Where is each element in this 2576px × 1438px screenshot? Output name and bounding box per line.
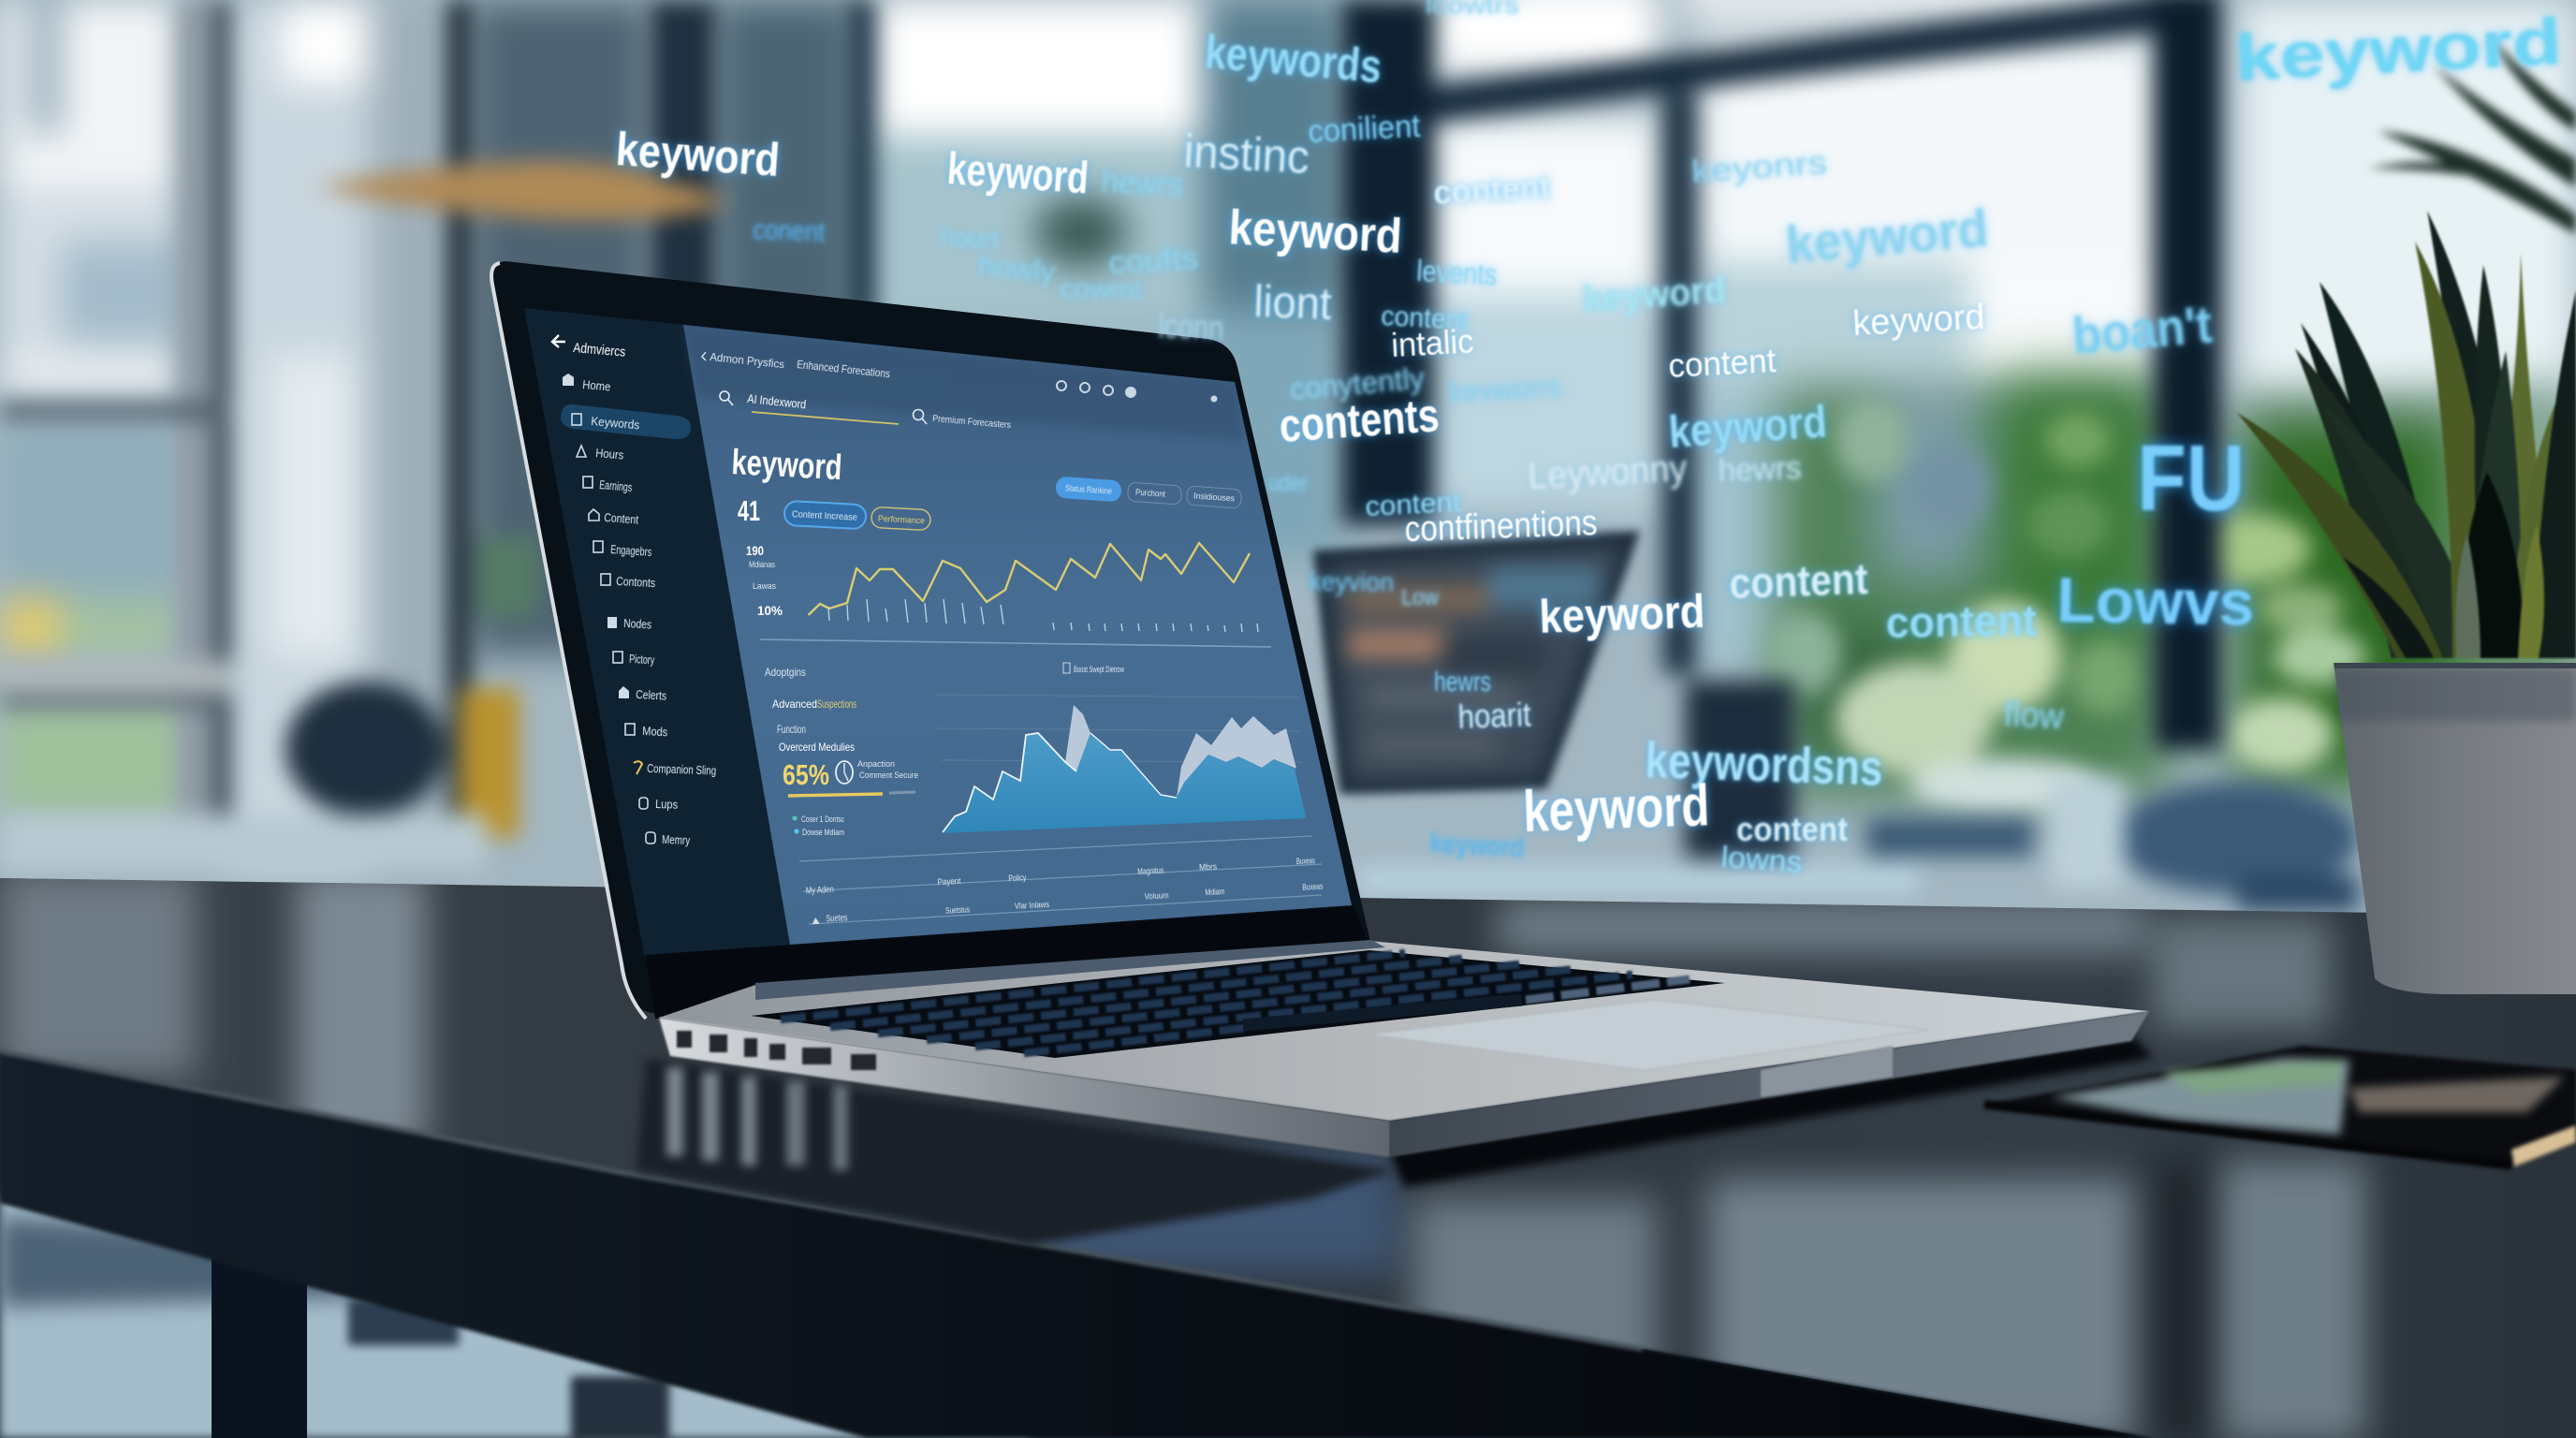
centre floating words: keyonrs [1690,145,1828,190]
advanced suggestions panel: Suspections [817,697,856,711]
nav item: Pictory [613,652,655,667]
lower floating words: keyword [1522,773,1710,844]
nav item: Earnings: Earnings [599,477,633,494]
secondary search: Premium Forecasters [932,414,1011,431]
line chart axis labels: 190 [746,543,764,558]
centre floating words: content [1432,168,1551,212]
right floating words [1729,5,2563,737]
tab pills: Status Rankine [1065,483,1112,496]
chart divider [760,639,1271,647]
right floating words: FU [2137,426,2245,531]
pill: performance [871,506,931,531]
area chart [936,695,1306,833]
data table: Buxeas [1296,856,1315,866]
data table: Buxeas [1302,882,1324,892]
blurred palm fronds [2368,37,2576,234]
stat 65%: 65% [783,758,829,791]
nav item: Memry [646,832,691,847]
table top [0,871,2576,1438]
floor under table [0,1198,1030,1438]
centre floating words: Leywonny [1527,448,1688,497]
table leg [212,1255,307,1438]
advanced suggestions panel: Function [777,723,806,736]
trackpad [1369,1000,1928,1070]
centre floating words: contents [1278,389,1441,452]
breadcrumb [702,350,891,380]
centre floating words: content [1667,341,1777,385]
left floating words: keyword [614,123,782,186]
foliage outside the window [1778,374,2576,796]
centre floating words: keywords [1203,25,1383,93]
breadcrumb: Enhanced Forecations [797,358,891,380]
data table: Policy [1008,873,1027,883]
nav item: Content: Content [604,510,639,527]
right floating words: content [1885,595,2037,647]
data table: Suetes [826,913,848,924]
left floating words: hewrs [1101,161,1185,204]
nav item: Nodes [607,616,652,632]
hinge panel [646,906,1369,1019]
advanced suggestions panel: Overcerd Medulies [779,741,855,754]
laptop [491,261,2149,1157]
advanced suggestions panel [772,697,918,837]
data table: Vlar Inlaws [1015,900,1050,911]
centre floating words: intalic [1390,321,1474,364]
centre floating words: keyword [1227,200,1403,264]
nav item: Mods: Mods [642,724,668,739]
sidebar navigation [552,335,716,847]
right floating words: flow [2003,695,2065,737]
plant pot [2334,663,2576,994]
back arrow and workspace title [552,335,626,360]
laptop shadow [1390,1037,2153,1187]
plant [2237,37,2576,658]
lower floating words: keyword [1429,828,1525,863]
lower floating words: hoarit [1457,695,1531,736]
data table: Suetstus [945,904,971,916]
nav item: Lups [639,797,679,812]
dashboard title: keyword [731,443,843,488]
lower floating words [1309,566,1884,879]
nav item: Nodes: Nodes [623,616,652,632]
right floating words: Lowvs [2056,565,2255,639]
background laptop [1313,531,1640,794]
nav item: Home [563,374,610,391]
centre floating words [1182,0,1828,550]
data table: My Aden [806,885,834,897]
left floating words: lconn [1158,306,1224,346]
pointed leaves [2237,211,2576,658]
nav item: Earnings [583,477,633,494]
search field: AI Indexword [747,391,807,412]
centre floating words: conilient [1307,109,1422,150]
nav item: Hours: Hours [595,446,624,462]
chart filter [1063,663,1124,674]
left floating words: uder [1268,471,1308,496]
nav item: Pictory: Pictory [629,652,655,667]
pill: performance: Performance [878,514,925,525]
lower floating words: keyvion [1309,566,1394,597]
centre floating words: kevworrs [1448,370,1562,409]
left floating words: coufts [1107,241,1199,281]
advanced suggestions panel: Coser 1 Dontsc [801,814,844,824]
centre floating words: content [1381,301,1470,336]
centre floating words: keyword [1667,397,1828,458]
advanced suggestions panel: Dowse Mdiam [802,828,844,837]
data table: Mbrs [1199,862,1218,873]
laptop lid [491,261,1371,1019]
pill: content increase [783,501,867,529]
pill: content increase: Content Increase [792,509,858,523]
advanced suggestions panel: Advanced [772,697,817,711]
lower floating words: Low [1401,585,1440,610]
right floating words: keyword [1852,298,1985,344]
nav item: Engagebrs: Engagebrs [610,542,652,559]
left floating words: hourt [940,222,1000,254]
tab pills: Purchont [1135,488,1166,499]
space bar [1243,1000,1522,1025]
right floating words: content [1729,554,1868,608]
nav item: Lups: Lups [655,797,679,812]
nav item: Engagebrs [593,541,652,559]
advanced suggestions panel: Comment Secure [859,770,918,780]
breadcrumb: Admon Prysfics [710,350,785,371]
line chart axis labels [746,543,783,618]
nav item: Celerts: Celerts [636,687,667,703]
nav item: Memry: Memry [662,832,691,847]
nav item: Celerts [619,686,667,703]
centre floating words: conytently [1288,361,1426,406]
lower floating words: hewrs [1434,667,1491,697]
line chart axis labels: Mdianas [749,560,775,569]
right floating words: keyword [1784,198,1990,274]
nav item: Home: Home [582,377,611,394]
line chart axis labels: 10% [757,603,783,618]
tab pills: Insidiouses [1193,491,1236,504]
centre floating words: liont [1253,277,1332,330]
line chart axis labels: Lawas [753,581,776,591]
blurred office background [0,0,2576,974]
left floating words: howly [976,248,1057,288]
centre floating words: content [1365,487,1462,522]
dashboard header band [683,325,1245,440]
advanced suggestions panel: Anpaction [857,759,895,769]
nav item: Contont: Contonts [616,574,656,590]
toolbar icons [1057,381,1217,401]
side ports [677,1031,876,1070]
front notch [1761,1046,1893,1097]
centre floating words: contfinentions [1404,504,1598,550]
right floating words: boan't [2071,294,2214,365]
right floating words: keyword [2233,5,2563,95]
data table: Mdiam [1205,887,1225,897]
back series [1065,705,1090,771]
front series [943,733,1306,833]
nav item: Companion Sling: Companion Sling [647,761,716,778]
nav item: Keywords active: Keywords [591,414,640,433]
secondary search [914,410,1011,431]
data table: Magnitus [1137,865,1164,876]
data table: Payent [937,876,961,887]
search field [720,391,899,424]
back arrow and workspace title: Admviercs [573,340,626,360]
nav item: Companion Sling [634,761,716,778]
laptop reflection on table [637,1058,1395,1245]
left floating words: conent [753,214,826,248]
nav item: Mods [625,724,668,739]
data table [799,836,1324,925]
tablet on table [1984,1046,2576,1167]
left floating words: cowmt [1060,273,1143,306]
laptop screen [524,308,1352,955]
table front edge [0,1051,2153,1438]
hinge wedge [755,940,1385,1000]
laptop base [659,940,2149,1157]
metric 41: 41 [738,494,760,527]
left floating words [614,123,1308,496]
centre floating words: keyword [1582,269,1727,320]
centre floating words: instinc [1182,125,1310,183]
chart filter: Boost Swept Dietrow [1074,665,1124,674]
floating keywords cloud [614,0,2563,879]
lower floating words: lowns [1720,840,1804,879]
nav item: Content [589,509,639,527]
centre floating words: hewrs [1718,450,1802,489]
lower floating words: content [1736,810,1848,848]
left floating words: keyword [945,144,1090,204]
gauge icon [836,761,853,784]
lit right-hand keys [1526,979,1690,1000]
yellow line chart [809,543,1258,632]
centre floating words: levents [1416,254,1498,291]
lower floating words: keywordsns [1645,732,1884,797]
nav item: Contont [601,574,656,590]
nav item: Keywords active [561,404,691,439]
nav item: Hours [577,446,624,462]
lower floating words: keyword [1538,585,1705,643]
tab pills [1055,477,1242,508]
data table: Voluum [1144,890,1169,902]
keyboard [751,950,1725,1058]
section heading: adoptgins: Adoptgins [765,666,806,679]
